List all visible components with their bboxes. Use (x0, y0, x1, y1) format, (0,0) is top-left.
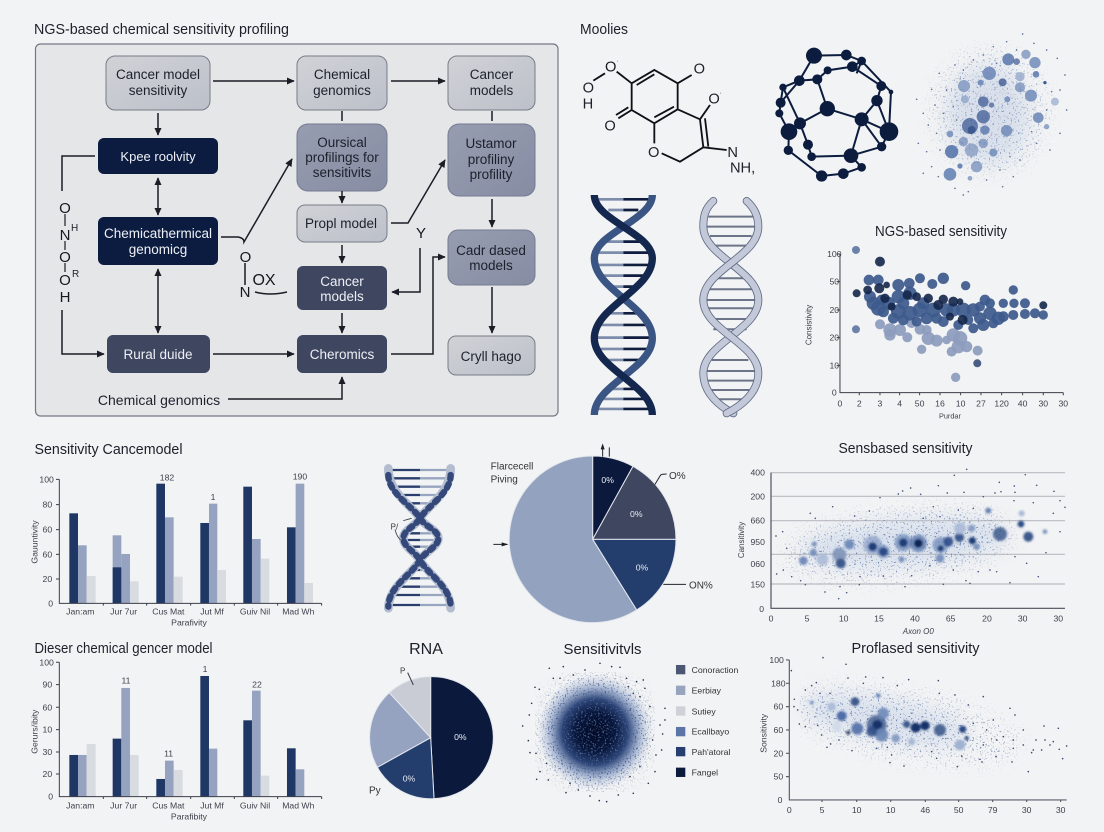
box: cancer models top: models (470, 83, 514, 98)
chemical label OX: OX (252, 272, 276, 289)
chart: bar chart top: Jut Mf (200, 607, 224, 617)
legend: Fangel (692, 768, 718, 778)
chart: bar chart bottom: 0 (48, 792, 53, 802)
chart: scatter NGS-based sensitivity: 120 (994, 398, 1009, 408)
box: cadr based models (448, 230, 535, 285)
legend: Sutiey (692, 706, 716, 716)
chart: scatter proflased sensitivity: 0 (787, 805, 792, 815)
box: oursical profilings: sensitivits (313, 165, 372, 180)
icon: DNA helix dark (594, 195, 652, 415)
box: cancer model sensitivity: sensitivity (129, 83, 188, 98)
title: NGS-based sensitivity: NGS-based sensitivity (875, 223, 1007, 240)
box: ustamor profiling: profiliny (468, 152, 515, 167)
chart: scatter NGS-based sensitivity: 30 (1038, 398, 1048, 408)
title: molecules: Moolies (580, 21, 628, 38)
chart: scatter NGS-based sensitivity: 40 (1018, 398, 1028, 408)
box: oursical profilings: profilings for (305, 150, 379, 165)
chart: scatter NGS-based sensitivity: 30 (1058, 398, 1068, 408)
chart: bubble cloud (915, 34, 1070, 195)
icon: molecule structure (583, 57, 755, 177)
chart: bar chart top: 20 (43, 574, 52, 584)
box: chemical genomics: Chemical (314, 67, 370, 82)
chart: bar chart bottom: Jur 7ur (110, 801, 137, 811)
chart: scatter proflased sensitivity: 180 (771, 678, 786, 688)
chart: scatter NGS-based sensitivity: 10 (829, 361, 839, 371)
title: proflased sensitivity: Proflased sensitivity (852, 640, 980, 657)
chart: scatter proflased sensitivity: 30 (1022, 805, 1032, 815)
chart: scatter NGS-based sensitivity: 20 (829, 305, 839, 315)
chart: scatter proflased sensitivity: 100 (769, 655, 784, 665)
chemical label OX (240, 249, 276, 301)
box: propl model (297, 205, 387, 242)
chart: small pie: P (400, 667, 405, 676)
chart: large pie: Piving (491, 475, 518, 486)
icon: molecule structure: H (583, 97, 593, 113)
icon: molecule structure: O (694, 62, 705, 78)
chart: small pie: 0% (403, 773, 416, 783)
legend: Ecallbayo (692, 727, 729, 737)
chart: scatter proflased sensitivity: Sonsitivity (759, 713, 769, 753)
chart: scatter proflased sensitivity (759, 655, 1070, 815)
chart: scatter sensbased sensitivity: 65 (946, 613, 956, 623)
chart: bar chart top: Cus Mat (152, 607, 185, 617)
chart: scatter NGS-based sensitivity: 27 (976, 398, 986, 408)
chart: scatter sensbased sensitivity: 0 (769, 613, 774, 623)
chart: scatter proflased sensitivity: 10 (886, 805, 896, 815)
icon: molecule structure: O (583, 81, 594, 97)
chart: scatter NGS-based sensitivity: 100 (827, 249, 842, 259)
title: RNA: RNA (409, 641, 443, 658)
box: ustamor profiling: Ustamor (465, 136, 517, 151)
icon: molecule structure: O (604, 118, 616, 134)
box: kpee roolvity (98, 138, 218, 174)
box: oursical profilings: Oursical (317, 135, 367, 150)
chart: small pie (369, 667, 493, 799)
chart: large pie: Flarcecell (491, 461, 533, 472)
box: cadr based models: Cadr dased (456, 243, 526, 258)
legend (676, 665, 738, 778)
icon: molecule structure: NH, (730, 161, 755, 177)
chart: scatter proflased sensitivity: 79 (988, 805, 998, 815)
chart: bar chart bottom: 30 (43, 747, 52, 757)
box: cryll hago (448, 336, 535, 375)
chart: scatter proflased sensitivity: 10 (852, 805, 862, 815)
chart: bar chart bottom: Jan:am (66, 801, 95, 811)
label Y: Y (416, 225, 426, 242)
chart: bar chart bottom (29, 657, 322, 821)
chart: radial dot cloud (523, 663, 665, 802)
chart: large pie: 0% (636, 562, 649, 572)
chart: bar chart bottom: Cus Mat (152, 801, 185, 811)
chart: scatter NGS-based sensitivity: Purdar (939, 411, 962, 420)
legend: Pah'atoral (692, 747, 730, 757)
chart: scatter sensbased sensitivity: 400 (750, 468, 765, 478)
chart: scatter sensbased sensitivity: Axon O0 (902, 627, 934, 636)
chart: scatter proflased sensitivity: 30 (1056, 805, 1066, 815)
chart: bar chart top: 80 (43, 500, 52, 510)
chart: bar chart bottom: 1 (203, 664, 208, 674)
chart: bar chart top: 190 (293, 472, 307, 482)
title: sensbased sensitivity: Sensbased sensitivity (838, 440, 973, 457)
chart: scatter sensbased sensitivity: 950 (750, 537, 765, 547)
chart: scatter sensbased sensitivity: 30 (1053, 613, 1063, 623)
chart: bar chart top: 60 (43, 549, 52, 559)
title: sensitivitvls: Sensitivitvls (564, 641, 642, 658)
chart: scatter proflased sensitivity: 50 (774, 772, 783, 782)
legend: Conoraction (692, 665, 738, 675)
chart: small pie: 0% (454, 732, 467, 742)
chart: scatter sensbased sensitivity (737, 468, 1065, 636)
chart: scatter NGS-based sensitivity: 10 (956, 398, 966, 408)
title: flow diagram heading: NGS-based chemical sensitivity profiling (34, 21, 289, 38)
chart: scatter sensbased sensitivity: 060 (750, 559, 765, 569)
panel: flow diagram (36, 44, 558, 416)
chart: bar chart bottom: Jut Mf (200, 801, 224, 811)
chart: scatter proflased sensitivity: 20 (774, 748, 783, 758)
icon: molecular network (775, 48, 898, 182)
chart: bar chart bottom: 11 (164, 748, 173, 758)
chart: bar chart top: 182 (160, 473, 174, 483)
legend: Eerbiay (692, 686, 722, 696)
box: chemical genomics: genomics (313, 83, 371, 98)
chart: scatter NGS-based sensitivity: 0 (838, 398, 843, 408)
chart: bar chart bottom: Guiv Nil (240, 801, 270, 811)
icon: DNA helix small (388, 468, 451, 608)
chart: bar chart bottom: Gerurs/ibity (29, 709, 39, 754)
box: propl model: Propl model (305, 216, 377, 231)
chart: bar chart bottom: Parafibity (171, 811, 208, 821)
chart: bar chart bottom: 100 (39, 657, 54, 667)
box: chemical genomics dark (98, 217, 218, 265)
chart: scatter NGS-based sensitivity: 50 (829, 277, 839, 287)
chart: bar chart bottom: 90 (43, 680, 52, 690)
box: cheromics: Cheromics (310, 347, 375, 362)
icon: molecule structure: O (708, 91, 720, 107)
chemical chain left: O (59, 249, 71, 266)
chart: scatter proflased sensitivity: 46 (920, 805, 930, 815)
chart: bar chart bottom: Mad Wh (282, 801, 315, 811)
chart: scatter sensbased sensitivity: 200 (750, 491, 765, 501)
box: chemical genomics (297, 56, 387, 110)
chemical label OX: N (240, 284, 250, 301)
box: chemical genomics dark: Chemicathermical (104, 226, 212, 241)
chemical chain left: O (59, 272, 71, 289)
box: rural duide: Rural duide (123, 347, 193, 362)
chart: bar chart bottom: 20 (43, 769, 52, 779)
chart: bar chart top: Jan:am (66, 607, 95, 617)
chart: bar chart top: Parafivity (171, 618, 207, 628)
chart: bar chart top: Gauuntivity (29, 520, 39, 564)
chart: scatter NGS-based sensitivity: 50 (915, 398, 925, 408)
title: sensitivity cancer model: Sensitivity Cancemodel (34, 441, 182, 458)
chart: bar chart bottom: 11 (121, 676, 131, 686)
box: cadr based models: models (469, 258, 513, 273)
chart: scatter NGS-based sensitivity: 0 (832, 388, 837, 398)
box: oursical profilings (297, 124, 387, 191)
icon: molecule structure: N (727, 145, 738, 161)
chart: scatter NGS-based sensitivity: 4 (897, 398, 902, 408)
icon: DNA helix light (703, 201, 758, 413)
chart: scatter sensbased sensitivity: 30 (1018, 613, 1028, 623)
icon: molecule structure: . (616, 57, 618, 64)
box: cancer models top: Cancer (470, 67, 514, 82)
chart: bar chart top: 100 (39, 474, 54, 484)
chart: scatter sensbased sensitivity: 150 (750, 579, 765, 589)
box: rural duide (107, 335, 210, 373)
chart: large pie: O% (669, 471, 686, 482)
box: cancer models dark (297, 266, 387, 310)
icon: molecule structure: . (720, 88, 722, 95)
chemical chain left: R (72, 269, 79, 280)
box: cancer models dark: models (320, 289, 364, 304)
chart: scatter sensbased sensitivity: 20 (982, 613, 992, 623)
label: chemical genomics: Chemical genomics (98, 392, 220, 408)
chart: scatter NGS-based sensitivity: 2 (857, 398, 862, 408)
chart: bar chart top: 1 (211, 492, 216, 502)
box: kpee roolvity: Kpee roolvity (120, 149, 196, 164)
box: cryll hago: Cryll hago (461, 349, 521, 364)
chemical chain left: O (59, 200, 71, 217)
chart: scatter NGS-based sensitivity: 3 (878, 398, 883, 408)
box: cancer model sensitivity: Cancer model (116, 67, 200, 82)
chart: bar chart top: 60 (43, 525, 52, 535)
chart: bar chart bottom: 60 (43, 702, 52, 712)
chart: scatter sensbased sensitivity: 40 (910, 613, 920, 623)
icon: molecule structure: O (648, 145, 659, 161)
chart: scatter NGS-based sensitivity: 20 (829, 333, 839, 343)
arrows: flow connectors (62, 81, 492, 399)
icon: molecule structure: O (605, 59, 616, 75)
chart: scatter proflased sensitivity: 50 (954, 805, 964, 815)
chemical chain left: N (60, 227, 70, 244)
chart: scatter sensbased sensitivity: 15 (874, 613, 884, 623)
chart: scatter proflased sensitivity: 0 (778, 795, 783, 805)
chart: scatter NGS-based sensitivity (804, 246, 1068, 420)
chemical chain left (59, 200, 79, 306)
box: cancer models dark: Cancer (320, 274, 364, 289)
chart: scatter sensbased sensitivity: 10 (839, 613, 849, 623)
box: ustamor profiling: profility (470, 167, 513, 182)
chemical chain left: H (60, 289, 70, 306)
chemical label OX: O (240, 249, 251, 266)
chart: bar chart bottom: 22 (252, 679, 262, 689)
chart: bar chart bottom: 10 (43, 725, 52, 735)
box: cancer models top (448, 56, 535, 110)
chart: large pie: 0% (601, 475, 614, 485)
box: cancer model sensitivity (106, 56, 210, 110)
chart: small pie: Py (369, 785, 381, 796)
box: ustamor profiling (448, 124, 535, 196)
chart: large pie (491, 443, 713, 623)
chart: bar chart top: Mad Wh (282, 607, 315, 617)
box: chemical genomics dark: genomicg (129, 242, 187, 257)
chart: scatter sensbased sensitivity: Cansitivity (737, 522, 746, 558)
chart: scatter sensbased sensitivity: 0 (759, 604, 764, 614)
chart: scatter sensbased sensitivity: 5 (805, 613, 810, 623)
chart: large pie: ON% (689, 580, 713, 591)
chart: scatter NGS-based sensitivity: Consistivity (804, 305, 813, 345)
chart: bar chart top: Guiv Nil (240, 607, 270, 617)
chart: scatter proflased sensitivity: 60 (774, 702, 783, 712)
icon: DNA helix small: P/ (391, 522, 399, 531)
title: dieser chemical gencer model: Dieser chemical gencer model (34, 640, 212, 657)
box: cheromics (297, 335, 387, 373)
chemical chain left: H (71, 223, 78, 234)
chart: large pie: 0% (630, 509, 643, 519)
chart: scatter proflased sensitivity: 60 (774, 725, 783, 735)
chart: scatter proflased sensitivity: 5 (820, 805, 825, 815)
chart: bar chart top (29, 472, 322, 628)
chart: scatter NGS-based sensitivity: 16 (935, 398, 945, 408)
chart: scatter sensbased sensitivity: 660 (750, 516, 765, 526)
chart: bar chart top: Jur 7ur (110, 607, 137, 617)
chart: bar chart top: 0 (48, 598, 53, 608)
